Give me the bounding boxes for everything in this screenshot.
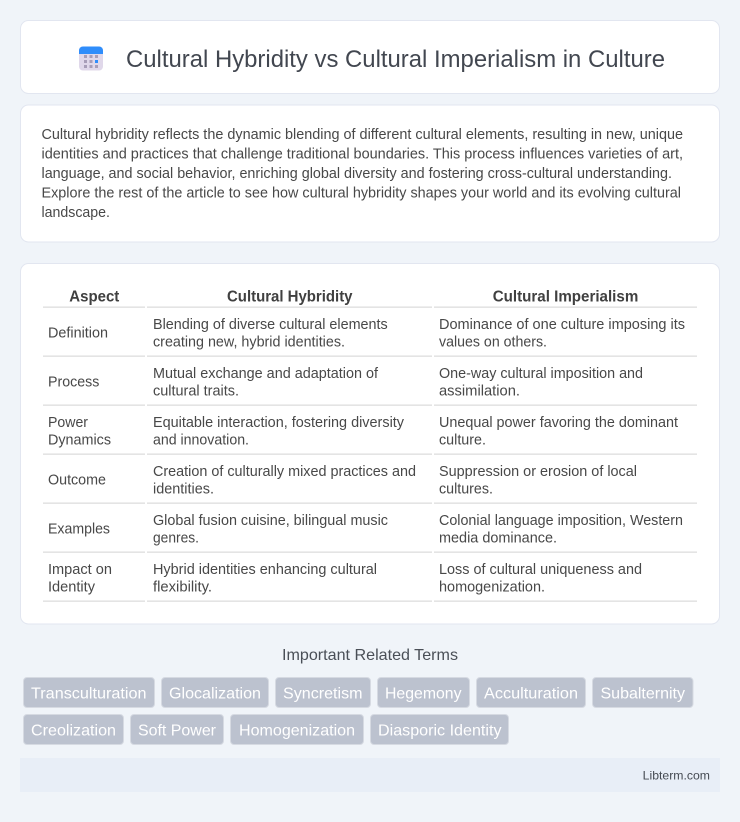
tag: Creolization	[24, 714, 124, 744]
icon: calendar	[79, 46, 103, 70]
row: Process: assimilation.	[439, 384, 520, 400]
row: Power Dynamics: Unequal power favoring the dominant	[439, 415, 678, 431]
tag: Soft Power	[130, 714, 224, 744]
row: Definition: Definition	[48, 326, 108, 342]
tag: Transculturation: Transculturation	[31, 685, 146, 702]
row: Definition: creating new, hybrid identities.	[153, 335, 345, 351]
tag: Acculturation: Acculturation	[484, 685, 578, 702]
table header row: Cultural Hybridity	[227, 289, 353, 306]
row: Power Dynamics: and innovation.	[153, 433, 249, 449]
row: Outcome: Suppression or erosion of local	[439, 464, 637, 480]
tag: Glocalization	[162, 678, 268, 708]
tag: Subalternity	[592, 678, 693, 708]
row: Power Dynamics: Power	[48, 415, 88, 431]
panel: intro paragraph: identities and practices that challenge traditional boundaries. This process influences varieties of art,	[42, 147, 683, 163]
footer bar	[20, 758, 720, 792]
row: Definition: Dominance of one culture imposing its	[439, 317, 685, 333]
row: Impact on Identity	[43, 562, 697, 602]
row: Examples: Examples	[48, 522, 110, 538]
tag: Subalternity: Subalternity	[600, 685, 685, 702]
row: Process: Mutual exchange and adaptation of	[153, 366, 379, 382]
row: Outcome: identities.	[153, 482, 214, 498]
row: Examples: media dominance.	[439, 531, 557, 547]
row: Impact on Identity: homogenization.	[439, 580, 545, 596]
panel: intro paragraph: landscape.	[42, 205, 110, 221]
tag: Syncretism: Syncretism	[283, 685, 362, 702]
header card	[20, 20, 720, 94]
panel: comparison table	[20, 264, 720, 624]
row: Definition	[43, 317, 697, 357]
related term tags	[24, 678, 693, 744]
row: Impact on Identity: flexibility.	[153, 580, 212, 596]
tag: Homogenization: Homogenization	[239, 723, 355, 740]
tag: Hegemony	[378, 678, 470, 708]
row: Power Dynamics	[43, 415, 697, 455]
tag: Syncretism	[276, 678, 370, 708]
row: Outcome: cultures.	[439, 482, 493, 498]
tag: Transculturation	[24, 678, 154, 708]
row: Definition: values on others.	[439, 335, 547, 351]
row: Impact on Identity: Identity	[48, 580, 96, 596]
tag: Creolization: Creolization	[31, 723, 116, 740]
row: Process	[43, 366, 697, 406]
row: Outcome	[43, 464, 697, 504]
row: Examples: genres.	[153, 531, 199, 547]
tag: Hegemony: Hegemony	[385, 685, 462, 702]
footer bar: Libterm.com	[643, 768, 710, 782]
row: Examples	[43, 513, 697, 553]
table header row	[43, 289, 697, 308]
panel: intro paragraph: Cultural hybridity reflects the dynamic blending of different cultural elements, resulting in new, unique	[42, 127, 683, 143]
row: Impact on Identity: Hybrid identities enhancing cultural	[153, 562, 377, 578]
row: Power Dynamics: Equitable interaction, fostering diversity	[153, 415, 405, 431]
row: Impact on Identity: Loss of cultural uniqueness and	[439, 562, 642, 578]
table header row: Aspect	[69, 289, 119, 306]
row: Examples: Global fusion cuisine, bilingual music	[153, 513, 388, 529]
row: Examples: Colonial language imposition, Western	[439, 513, 683, 529]
row: Process: cultural traits.	[153, 384, 239, 400]
row: Power Dynamics: Dynamics	[48, 433, 111, 449]
tag: Diasporic Identity	[370, 714, 508, 744]
tag: Acculturation	[476, 678, 586, 708]
table header row: Cultural Imperialism	[493, 289, 638, 306]
heading: related terms: Important Related Terms	[282, 647, 458, 664]
tag: Diasporic Identity: Diasporic Identity	[378, 723, 502, 740]
tag: Homogenization	[230, 714, 364, 744]
tag: Soft Power: Soft Power	[138, 723, 217, 740]
row: Power Dynamics: culture.	[439, 433, 486, 449]
title: Cultural Hybridity vs Cultural Imperialism in Culture	[126, 46, 665, 73]
row: Process: One-way cultural imposition and	[439, 366, 643, 382]
panel: intro paragraph	[20, 105, 720, 242]
tag: Glocalization: Glocalization	[169, 685, 261, 702]
row: Impact on Identity: Impact on	[48, 562, 112, 578]
panel: intro paragraph: language, and social behavior, enriching global diversity and fostering cross-cultural understanding.	[42, 166, 672, 182]
row: Process: Process	[48, 375, 99, 391]
row: Outcome: Outcome	[48, 473, 106, 489]
row: Outcome: Creation of culturally mixed practices and	[153, 464, 416, 480]
row: Definition: Blending of diverse cultural elements	[153, 317, 388, 333]
panel: intro paragraph: Explore the rest of the article to see how cultural hybridity shapes your world and its evolving cultural	[42, 186, 681, 202]
